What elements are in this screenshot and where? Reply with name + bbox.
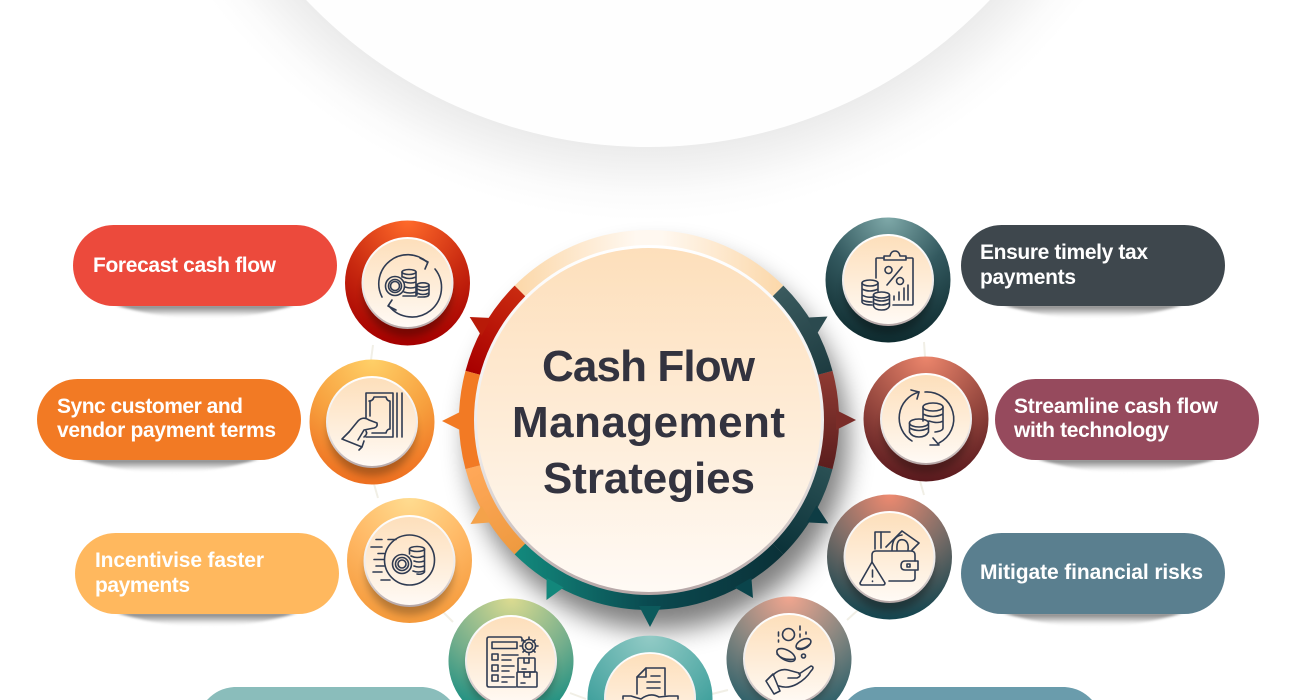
segment: light orange [474,467,521,548]
node: forecast [345,220,470,346]
title: Cash Flow [542,342,756,391]
pill: Ensure timely tax payments: payments [980,266,1076,289]
title: Management [512,398,785,447]
node: negotiation documents (cropped) [588,636,712,700]
segment: lower right dark teal [777,467,824,548]
node: wallet risk [827,494,952,620]
icon: wallet with warning triangle [860,531,919,585]
pill: Ensure timely tax payments: Ensure timely tax [980,241,1148,264]
pill: Incentivise faster payments: Incentivise faster [95,549,264,572]
segment: slate [777,292,824,373]
segmented ring around hub [468,239,830,601]
pill: Mitigate financial risks: Mitigate financial risks [980,561,1203,584]
icon: checklist with boxes and gear [487,637,538,687]
node: hand with coins [727,597,852,700]
title [512,342,785,503]
pill: Sync customer and vendor payment terms: vendor payment terms [57,419,276,442]
pill: Streamline cash flow with technology [995,379,1259,472]
pill: Sync customer and vendor payment terms [37,379,301,472]
title: Strategies [543,454,755,503]
segment: orange [468,373,474,467]
connector lines between nodes [371,342,925,699]
pill: Forecast cash flow: Forecast cash flow [93,254,277,277]
segment: bottom teal [521,548,777,601]
segment: top peach [521,239,777,292]
pill: Streamline cash flow with technology: Streamline cash flow [1014,395,1219,418]
ring arrow pointers [442,316,856,627]
segment: red [474,292,521,373]
icon: hand holding banknotes [342,393,402,450]
node: tax payments [826,218,950,342]
pill: bottom left (cropped) [207,687,450,700]
icon: document and handshake [623,668,678,699]
node: sync [310,360,434,484]
node: inventory checklist [448,598,574,700]
panel: top white circle with shadow halo [0,0,1296,225]
central hub circle [474,245,824,595]
pill: Mitigate financial risks [961,533,1225,626]
pill: Incentivise faster payments: payments [95,574,190,597]
pill: Streamline cash flow with technology: with technology [1013,419,1169,442]
main hub shadow [468,250,848,630]
node: incentivise [347,498,472,623]
pill: Forecast cash flow [73,225,337,318]
icon: fast moving coins [371,535,434,585]
pill: Ensure timely tax payments [961,225,1225,318]
icon: coins with cycle arrows [379,255,442,317]
icon: falling coins over open hand [766,626,813,694]
segment: maroon [824,373,830,467]
icon: circular arrows with coin stacks [899,390,954,445]
pill: Sync customer and vendor payment terms: Sync customer and [57,395,243,418]
icon: tax clipboard with coins and percent [862,251,913,310]
pill: Incentivise faster payments [75,533,339,626]
node: streamline technology [864,356,988,482]
pill: bottom right (cropped) [848,687,1092,700]
